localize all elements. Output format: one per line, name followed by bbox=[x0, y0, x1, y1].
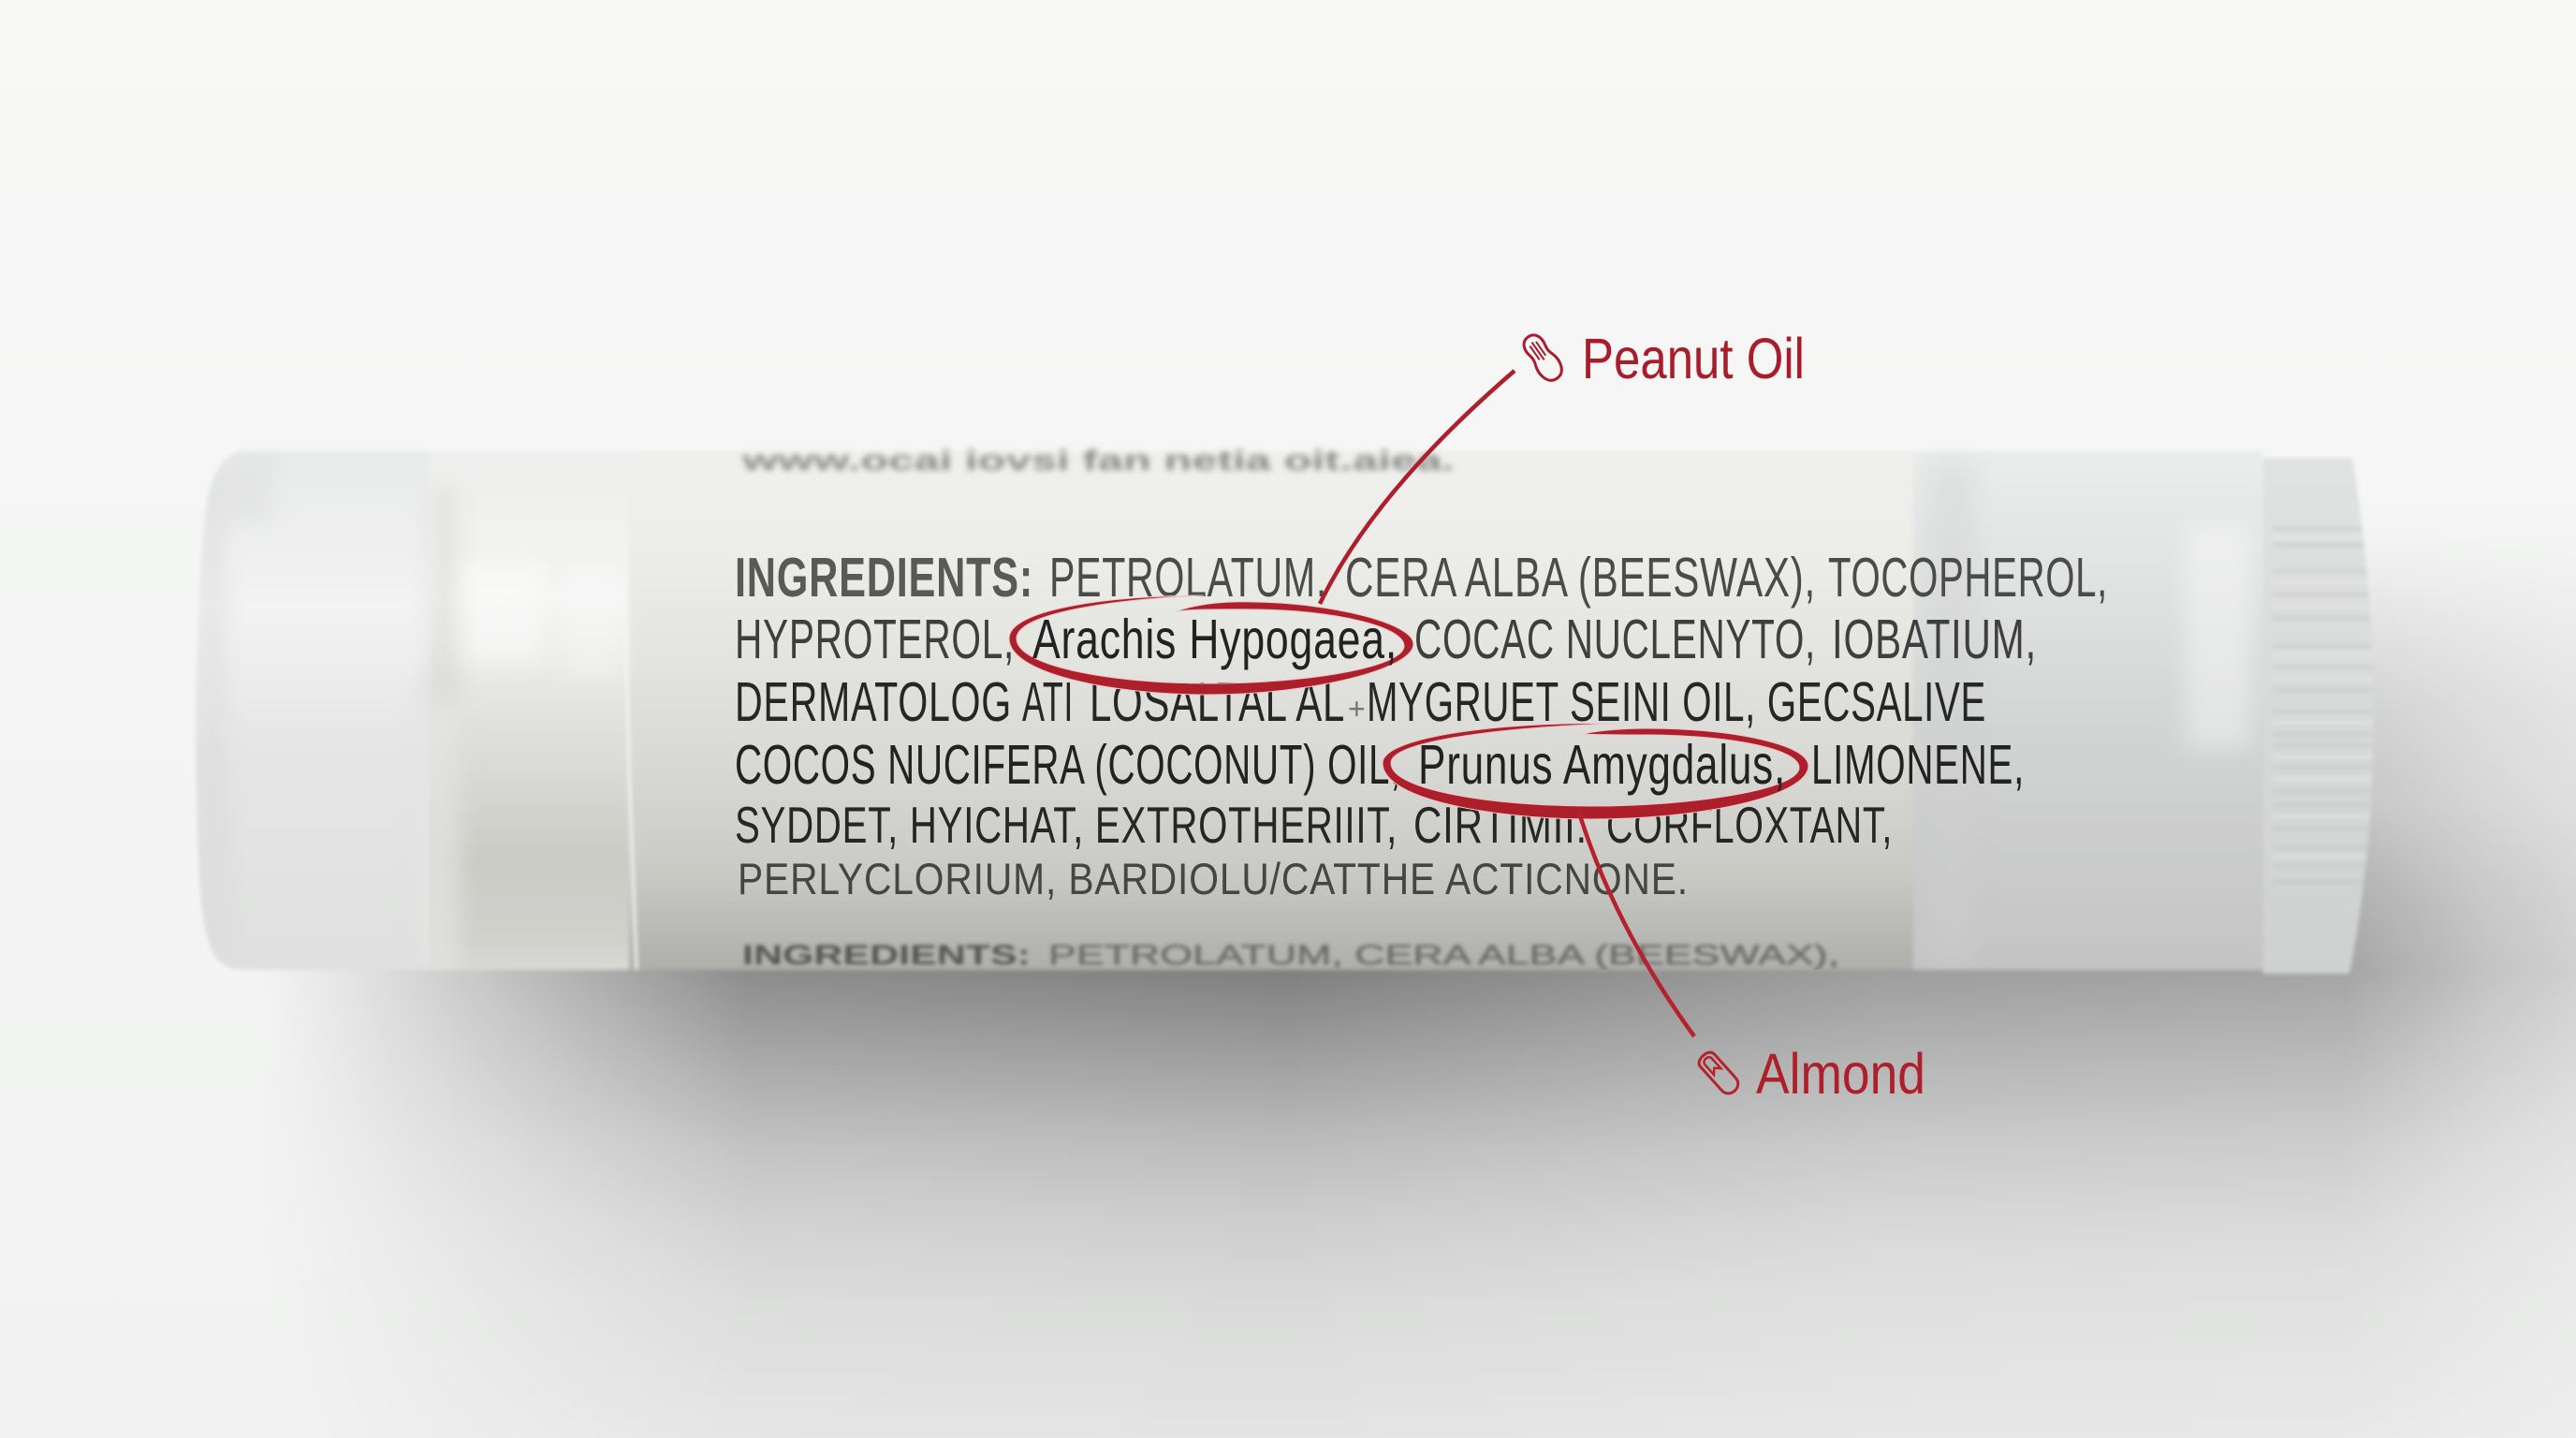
label: Almond: Almond bbox=[1756, 1042, 1925, 1106]
line 1: INGREDIENTS: bbox=[735, 547, 1033, 609]
line 5: SYDDET, HYICHAT, EXTROTHERIIIT, bbox=[735, 796, 1398, 854]
line 6: PERLYCLORIUM, BARDIOLU/CATTHE ACTICNONE. bbox=[738, 854, 1689, 903]
label bbox=[629, 450, 1913, 975]
highlighted ingredient: Arachis Hypogaea: Arachis Hypogaea, bbox=[1032, 609, 1398, 670]
line 3: DERMATOLOG bbox=[735, 671, 1012, 733]
line 1 bbox=[735, 547, 2108, 609]
line 3: LOSALTAL AL bbox=[1090, 671, 1345, 733]
line 1: TOCOPHEROL, bbox=[1828, 547, 2108, 609]
highlighted ingredient: Prunus Amygdalus: Prunus Amygdalus, bbox=[1418, 734, 1786, 796]
line 4: COCOS NUCIFERA (COCONUT) OIL, bbox=[735, 734, 1401, 796]
cap neck bbox=[455, 578, 631, 972]
transparent band bbox=[1913, 450, 2263, 975]
line 3: ATI bbox=[1022, 671, 1074, 733]
blurred top text on label: www.ocai iovsi fan netia oit.aiea. bbox=[740, 444, 1455, 477]
label: Peanut Oil: Peanut Oil bbox=[1582, 327, 1805, 390]
blurred bottom text on label bbox=[742, 940, 1839, 971]
icon: almond bbox=[1696, 1049, 1742, 1097]
blurred bottom text on label: INGREDIENTS: bbox=[742, 940, 1031, 971]
line 2 bbox=[735, 609, 2037, 670]
arrow: leader line to Peanut Oil bbox=[1320, 371, 1515, 604]
line 3: + bbox=[1348, 692, 1367, 726]
line 4: LIMONENE, bbox=[1811, 734, 2025, 796]
line 1: CERA ALBA (BEESWAX), bbox=[1345, 547, 1816, 609]
blurred bottom text on label: PETROLATUM, CERA ALBA (BEESWAX), bbox=[1048, 940, 1839, 971]
tube highlights bbox=[200, 459, 2251, 974]
line 2: HYPROTEROL, bbox=[735, 609, 1015, 670]
circle: Arachis Hypogaea bbox=[1009, 595, 1413, 695]
line 1: PETROLATUM, bbox=[1049, 547, 1327, 609]
lip balm tube bbox=[192, 450, 2378, 975]
line 5: CIRTIMII: bbox=[1413, 796, 1588, 854]
line 3: MYGRUET SEINI OIL, GECSALIVE bbox=[1367, 671, 1986, 733]
ingredients list bbox=[735, 547, 2108, 903]
line 5: CORFLOXTANT, bbox=[1606, 796, 1893, 854]
line 2: IOBATIUM, bbox=[1832, 609, 2037, 670]
ribbed end cap bbox=[2263, 450, 2378, 975]
line 3 bbox=[735, 671, 1986, 733]
arrow: leader line to Almond bbox=[1579, 813, 1694, 1036]
icon: peanut bbox=[1518, 330, 1567, 385]
circle: Prunus Amygdalus bbox=[1383, 724, 1808, 819]
tube shadow bbox=[309, 573, 2576, 1438]
left cap bbox=[192, 450, 432, 975]
line 2: COCAC NUCLENYTO, bbox=[1414, 609, 1816, 670]
